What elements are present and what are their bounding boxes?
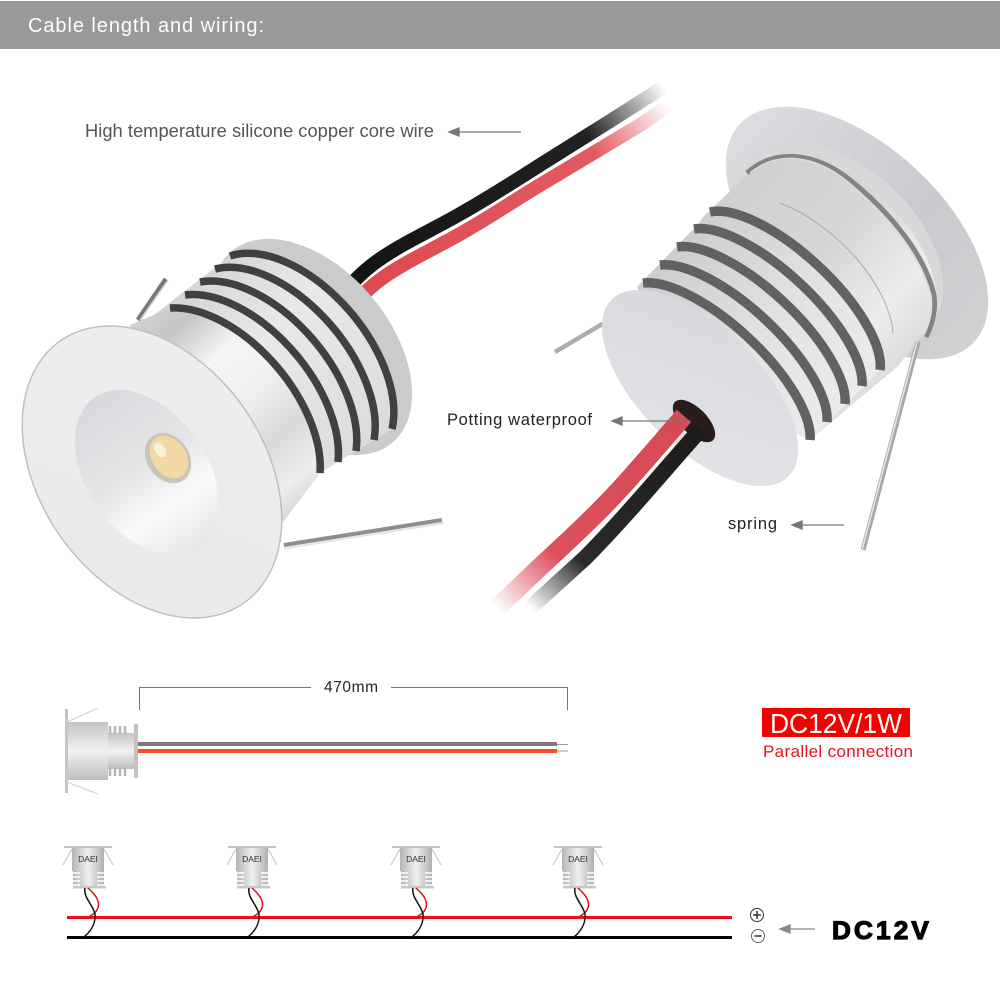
- right lamp flange inner ring: [699, 104, 981, 382]
- label: silicone wire: High temperature silicone copper core wire: [85, 121, 434, 141]
- arrow: spring: [792, 521, 844, 529]
- left lamp back plate: [172, 201, 452, 493]
- 470mm label: 470mm: [324, 679, 378, 696]
- parallel lamp 3: [391, 846, 441, 937]
- cable length dimension: [140, 679, 568, 710]
- red positive bus line: [67, 916, 732, 919]
- right lamp flange: [681, 60, 1000, 406]
- side view flange: [65, 709, 68, 793]
- potting hole: [666, 393, 722, 449]
- left lamp flange: [0, 277, 336, 667]
- left lamp fin block: [150, 253, 394, 522]
- side view gray wire: [138, 742, 557, 746]
- side view wire tips: [557, 744, 568, 751]
- arrow: wire: [449, 128, 521, 136]
- side view pins: [67, 708, 98, 794]
- parallel lamp 3: DAEI: [406, 854, 426, 864]
- right lamp, rear view: [555, 60, 1000, 550]
- LED: [135, 424, 201, 492]
- parallel lamp 4: [553, 846, 603, 937]
- black negative bus line: [67, 936, 732, 939]
- spring coil: [747, 156, 935, 337]
- left lamp, LED face view: [0, 201, 452, 667]
- right lamp end disc: [569, 257, 831, 519]
- parallel lamp 2: DAEI: [242, 854, 262, 864]
- right lamp heat sink bands: [643, 211, 880, 440]
- right lamp spring leg: [862, 342, 918, 550]
- arrow: potting: [612, 417, 690, 425]
- parallel lamp 1: DAEI: [78, 854, 98, 864]
- polarity symbols: [750, 908, 764, 942]
- wires of right lamp: [497, 416, 701, 608]
- header title: Cable length and wiring:: [28, 15, 264, 37]
- left lamp cylinder body: [130, 308, 320, 522]
- parallel lamp 2: [227, 846, 277, 937]
- left lamp heat sink bands: [170, 253, 394, 473]
- side view red wire: [138, 749, 557, 753]
- parallel connection label: Parallel connection: [763, 742, 913, 761]
- label: spring: spring: [728, 515, 777, 533]
- side view heat sink: [108, 724, 138, 778]
- right lamp upper body: [660, 156, 936, 440]
- parallel lamp 4: DAEI: [568, 854, 588, 864]
- arrow: DC12V: [780, 925, 815, 933]
- label: spring: [728, 515, 844, 533]
- DC12V/1W badge: DC12V/1W: [770, 708, 903, 739]
- header bar: [0, 1, 1000, 49]
- side view lamp with cable: [65, 708, 568, 794]
- DC12V label: DC12V: [832, 917, 932, 945]
- left lamp rear pin: [138, 279, 168, 320]
- right lamp left pin: [555, 323, 604, 352]
- left lamp recess: [45, 363, 249, 583]
- left lamp front pin: [284, 521, 442, 548]
- right lamp step ring: [780, 203, 893, 333]
- parallel lamp 1: [63, 846, 113, 937]
- right lamp fin block: [637, 211, 880, 440]
- wires of left lamp: [340, 86, 668, 310]
- label: potting waterproof: [447, 411, 690, 429]
- side view body: [68, 722, 108, 780]
- label: potting waterproof: Potting waterproof: [447, 411, 592, 429]
